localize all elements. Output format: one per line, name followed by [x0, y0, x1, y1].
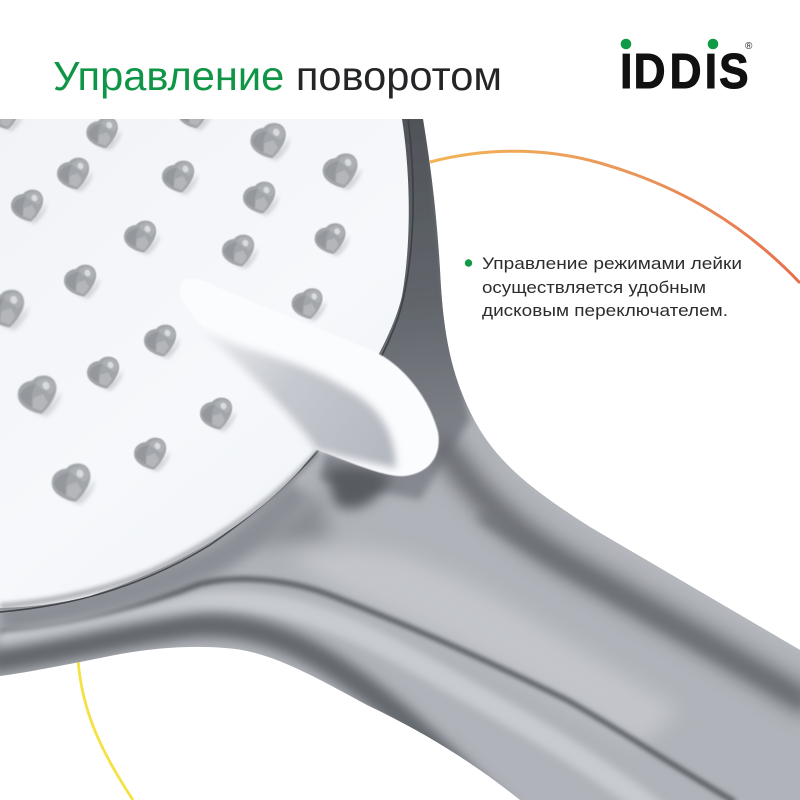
- white spray disk: [0, 119, 409, 608]
- text block: description: Управление режимами лейки: [482, 255, 742, 273]
- text block: description: осуществляется удобным: [482, 279, 706, 297]
- dial switch lever: [216, 339, 440, 477]
- title: Управление поворотом: [53, 53, 502, 99]
- bullet: [465, 259, 472, 267]
- decorative arc: yellow: [78, 660, 133, 800]
- logo: iddis: ®: [745, 41, 753, 52]
- text block: description: дисковым переключателем.: [482, 302, 728, 320]
- spray nozzles: [0, 97, 362, 505]
- disk edge shadow: [0, 452, 318, 606]
- logo: iddis: IDDIS: [620, 44, 749, 99]
- disk rim line: [0, 119, 413, 612]
- decorative arc: orange: [430, 151, 800, 283]
